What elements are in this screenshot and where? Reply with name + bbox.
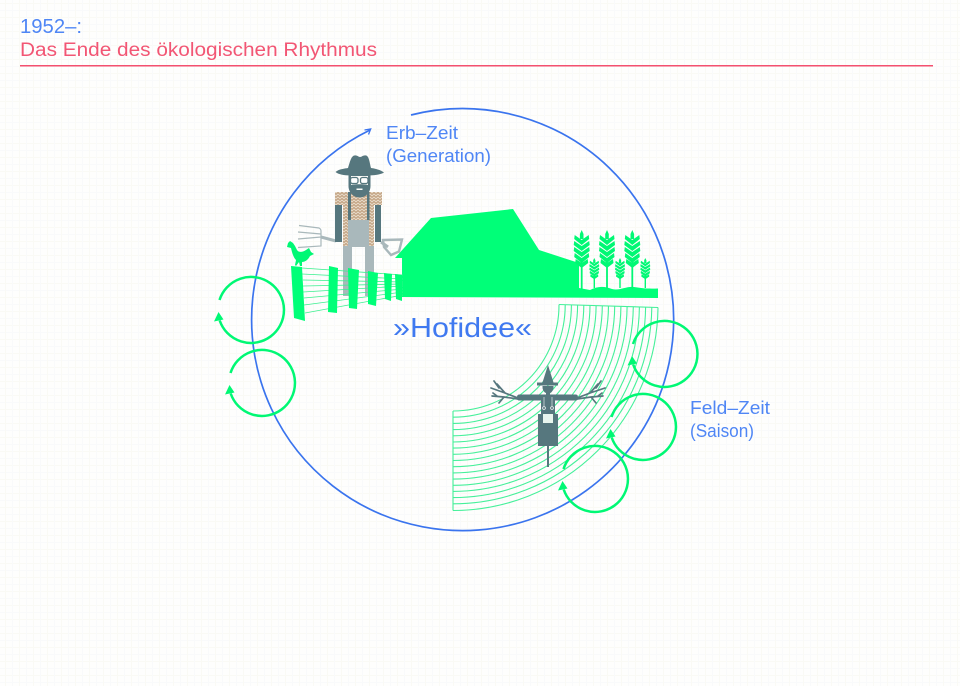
field with concentric furrows <box>453 304 658 510</box>
title: subtitle: Das Ende des ökologischen Rhythmus <box>20 40 377 61</box>
wheat: tall stalks <box>574 230 640 289</box>
farmer: overalls <box>343 220 374 296</box>
farmer: glasses <box>350 178 368 184</box>
farmer: pitchfork <box>298 226 336 248</box>
cycle arrow: generation loop 2 <box>225 350 295 416</box>
farmer <box>298 155 402 296</box>
farmer: face and beard <box>348 174 370 198</box>
farmer: spade handle <box>381 240 402 255</box>
scarecrow: body and arms <box>517 394 578 446</box>
fence <box>291 266 403 321</box>
scarecrow: pole <box>547 446 549 467</box>
label: Erb-Zeit: Erb–Zeit <box>386 122 458 143</box>
label: Feld-Zeit: Feld–Zeit <box>690 397 770 418</box>
cycle arrow: generation loop 1 <box>214 277 284 343</box>
label: Erb-Zeit <box>386 122 491 166</box>
cycle arrow: season loop 2 <box>606 394 676 460</box>
scarecrow: branches <box>491 381 605 403</box>
label: Feld-Zeit <box>690 397 770 441</box>
farmer: arms and braces <box>335 192 381 242</box>
fence: wires <box>302 268 403 313</box>
scarecrow: braces and pocket <box>543 397 553 423</box>
icon: rooster <box>287 241 314 266</box>
cycle arrow: season loop 1 <box>628 321 697 387</box>
label: Feld-Zeit: (Saison) <box>690 420 754 441</box>
farmer: mouth <box>356 188 362 190</box>
title: year: 1952–: <box>20 16 82 38</box>
farmer: shirt <box>335 192 382 246</box>
large cycle arrow: Erb-Zeit <box>252 109 674 531</box>
farmer: hat <box>336 155 384 175</box>
wheat crops <box>574 230 650 289</box>
fence: posts <box>291 266 402 321</box>
title <box>20 16 377 61</box>
label: Hofidee: »Hofidee« <box>393 312 532 343</box>
barn and ground silhouette <box>395 209 658 298</box>
label: Erb-Zeit: (Generation) <box>386 145 491 166</box>
wheat: short stalks <box>589 258 650 288</box>
scarecrow <box>491 365 605 467</box>
scarecrow: hat and head <box>537 365 558 395</box>
cycle arrow: season loop 3 <box>558 446 628 512</box>
